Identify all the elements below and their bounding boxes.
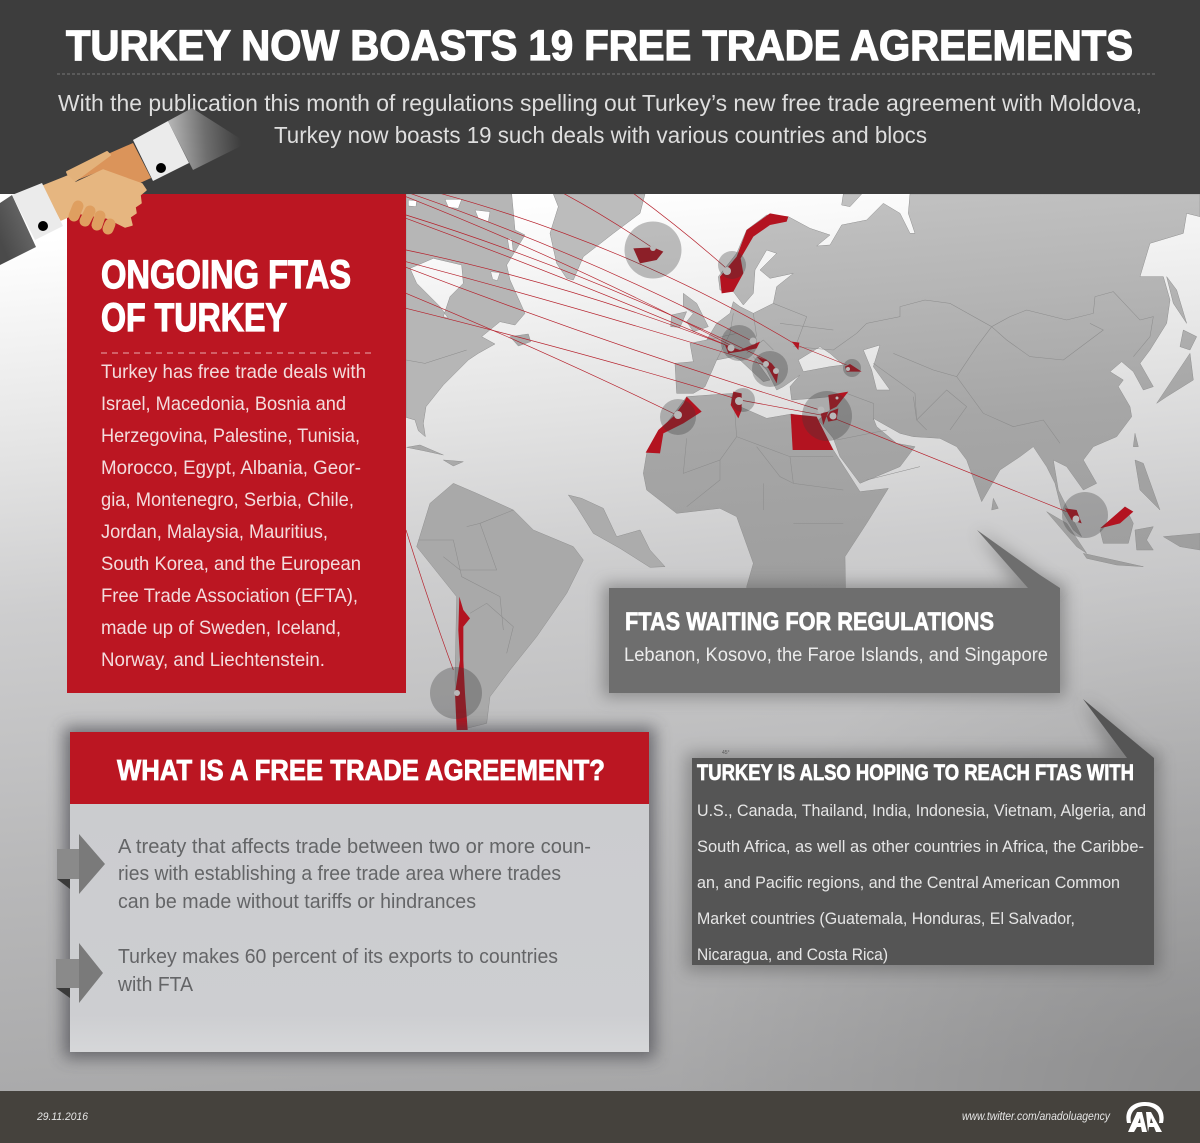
- text: hoping list: Market countries (Guatemala, Honduras, El Salvador,: [697, 909, 1075, 928]
- text: hoping list: Nicaragua, and Costa Rica): [697, 945, 888, 964]
- Norway: [720, 213, 788, 293]
- Georgia: [845, 364, 862, 372]
- Malaysia: [1065, 507, 1133, 528]
- icon: arrow two: [56, 943, 103, 1003]
- Africa: [643, 393, 888, 657]
- text: partner list: Free Trade Association (EFTA),: [101, 585, 358, 607]
- icon: handshake: [0, 108, 247, 265]
- text: export share: [117, 946, 558, 996]
- panel: what is a free trade agreement: [56, 727, 655, 1058]
- text: export share: Turkey makes 60 percent of its exports to countries: [118, 946, 558, 968]
- icon: arrow one: [57, 834, 105, 894]
- Morocco: [646, 397, 702, 453]
- source url: www.twitter.com/anadoluagency: [962, 1111, 1111, 1123]
- Switzerland and Liechtenstein: [725, 342, 760, 353]
- subtitle: [58, 90, 1142, 148]
- text: partner list: [101, 361, 366, 671]
- heading: waiting: FTAS WAITING FOR REGULATIONS: [625, 608, 994, 636]
- right sleeve: [168, 108, 247, 170]
- Egypt: [791, 414, 833, 450]
- text: definition: ries with establishing a free trade area where trades: [118, 863, 561, 885]
- text: partner list: gia, Montenegro, Serbia, Chile,: [101, 489, 354, 511]
- location dots: [454, 245, 1080, 696]
- country borders: [406, 292, 1153, 653]
- South America: [417, 483, 583, 730]
- icon: Anadolu Agency logo: [1126, 1102, 1164, 1132]
- British Isles: [671, 293, 708, 332]
- text: hoping list: U.S., Canada, Thailand, India, Indonesia, Vietnam, Algeria, and: [697, 801, 1146, 820]
- left sleeve: [0, 195, 36, 265]
- red highlighted partner countries: [455, 213, 1133, 730]
- panel: FTAs waiting for regulations: [603, 530, 1065, 697]
- Novaya Zemlya: [842, 194, 862, 207]
- text: hoping list: [697, 801, 1146, 964]
- date: 29.11.2016: [36, 1111, 89, 1123]
- footer: [0, 1091, 1200, 1143]
- text: partner list: made up of Sweden, Iceland,: [101, 617, 341, 639]
- text: partner list: Jordan, Malaysia, Mauritius,: [101, 521, 328, 543]
- Eurasia: [675, 194, 1200, 537]
- North America: [406, 194, 525, 437]
- panel: ongoing FTAs: [67, 194, 406, 693]
- title: TURKEY NOW BOASTS 19 FREE TRADE AGREEMENTS: [66, 22, 1133, 70]
- Tunisia: [731, 392, 742, 418]
- map background: [0, 190, 1200, 1095]
- heading: ongoing FTAs: ONGOING FTAS: [101, 253, 351, 297]
- Caribbean islands: [407, 445, 463, 466]
- text: definition: [118, 836, 591, 913]
- text: partner list: Israel, Macedonia, Bosnia and: [101, 393, 346, 415]
- text: partner list: Morocco, Egypt, Albania, Geor-: [101, 457, 361, 479]
- text: hoping list: an, and Pacific regions, and the Central American Common: [697, 873, 1120, 892]
- subtitle: With the publication this month of regulations spelling out Turkey’s new free trade agreement with Moldova,: [58, 90, 1142, 116]
- Jordan and Palestine: [827, 408, 838, 422]
- subtitle: Turkey now boasts 19 such deals with various countries and blocs: [274, 122, 927, 148]
- Balkans: [757, 357, 778, 383]
- text: hoping list: South Africa, as well as other countries in Africa, the Caribbe-: [697, 837, 1144, 856]
- Israel: [821, 412, 828, 425]
- location circles: [430, 222, 1108, 719]
- text: definition: can be made without tariffs or hindrances: [118, 891, 476, 913]
- text: export share: with FTA: [117, 974, 194, 996]
- panel: hoping to reach FTAs: [686, 699, 1160, 971]
- text: definition: A treaty that affects trade between two or more coun-: [118, 836, 591, 858]
- Asian islands: [992, 277, 1200, 567]
- Mexico and Central America: [568, 495, 665, 567]
- Newfoundland: [510, 334, 531, 346]
- header band: [0, 0, 1200, 194]
- text: partner list: Norway, and Liechtenstein.: [101, 649, 325, 671]
- heading: definition: WHAT IS A FREE TRADE AGREEMENT?: [117, 755, 605, 787]
- text: partner list: Turkey has free trade deals with: [101, 361, 366, 383]
- Iceland: [633, 247, 663, 263]
- Greenland: [550, 194, 645, 280]
- world map: [406, 194, 1200, 829]
- Chile: [455, 597, 470, 730]
- heading: ongoing FTAs: [101, 253, 351, 340]
- route lines: [406, 193, 1067, 670]
- Moldova: [792, 342, 799, 350]
- heading: ongoing FTAs: OF TURKEY: [101, 296, 287, 340]
- text: partner list: Herzegovina, Palestine, Tunisia,: [101, 425, 360, 447]
- panel: hoping to reach FTAs: 45°: [722, 750, 730, 756]
- Syria region: [828, 392, 848, 410]
- text: partner list: South Korea, and the European: [101, 553, 361, 575]
- text: waiting list: Lebanon, Kosovo, the Faroe Islands, and Singapore: [624, 645, 1048, 666]
